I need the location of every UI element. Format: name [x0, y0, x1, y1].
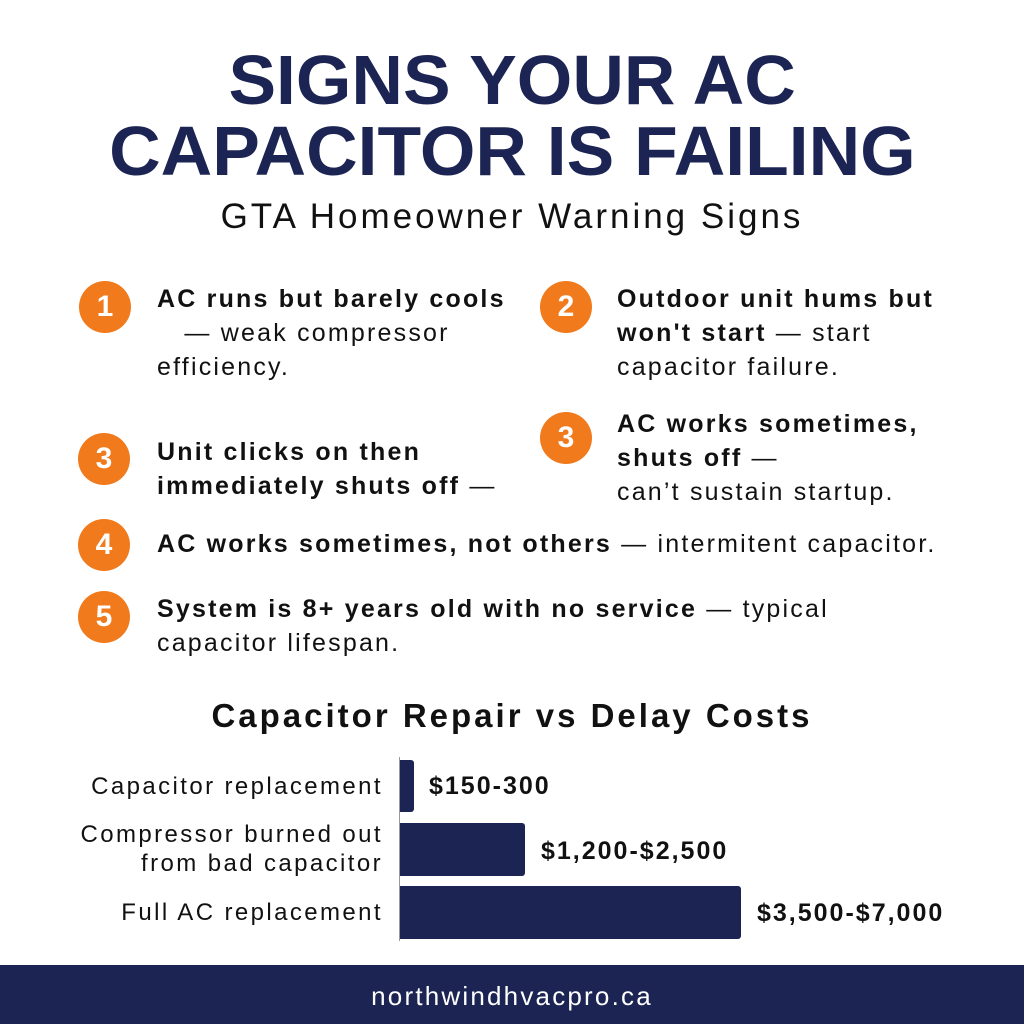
bar: capacitor replacement: Capacitor replacement [91, 773, 383, 800]
sign 4: AC works sometimes, not others — intermitent capacitor. [157, 530, 937, 558]
sign 3 right [540, 410, 919, 506]
sign 3 left: immediately shuts off — [157, 472, 497, 500]
title [109, 41, 915, 190]
sign 2: won't start — start [617, 319, 872, 347]
bar: compressor: from bad capacitor [141, 850, 383, 877]
sign 4 [78, 519, 937, 571]
badge 2: 2 [558, 290, 574, 323]
title: SIGNS YOUR AC [228, 41, 796, 119]
badge 3: 3 [96, 442, 112, 475]
badge 3: 3 [558, 421, 574, 454]
footer: northwindhvacpro.ca [371, 981, 653, 1011]
title: CAPACITOR IS FAILING [109, 112, 915, 190]
sign 3 right: AC works sometimes, [617, 410, 919, 438]
bar: compressor [80, 821, 728, 877]
sign 5: capacitor lifespan. [157, 629, 400, 657]
sign 1: — weak compressor [184, 319, 450, 347]
badge 4 [78, 519, 130, 571]
bar chart [80, 757, 944, 941]
badge 5 [78, 591, 130, 643]
sign 3 right: can’t sustain startup. [617, 478, 895, 506]
sign 3 left [78, 433, 497, 500]
sign 3 right: shuts off — [617, 444, 779, 472]
bar: full replacement: Full AC replacement [121, 899, 383, 926]
sign 1 [79, 281, 506, 381]
sign 5 [78, 591, 829, 657]
bar: full replacement: $3,500-$7,000 [757, 899, 944, 927]
bar: full replacement [121, 886, 944, 939]
chart title: Capacitor Repair vs Delay Costs [211, 697, 813, 734]
badge 4: 4 [96, 528, 112, 561]
footer [0, 965, 1024, 1024]
bar: capacitor replacement: $150-300 [429, 772, 551, 800]
sign 3 left: Unit clicks on then [157, 438, 421, 466]
badge 1: 1 [97, 290, 113, 323]
sign 2: Outdoor unit hums but [617, 285, 934, 313]
subtitle: GTA Homeowner Warning Signs [221, 197, 803, 236]
sign 1: AC runs but barely cools [157, 285, 506, 313]
bar: capacitor replacement [91, 760, 551, 812]
sign 1: efficiency. [157, 353, 290, 381]
badge 3 [540, 412, 592, 464]
badge 3 [78, 433, 130, 485]
bar: compressor: $1,200-$2,500 [541, 837, 728, 865]
sign 5: System is 8+ years old with no service — typical [157, 595, 829, 623]
badge 5: 5 [96, 600, 112, 633]
bar: compressor: Compressor burned out [80, 821, 383, 848]
badge 2 [540, 281, 592, 333]
sign 2 [540, 281, 934, 381]
badge 1 [79, 281, 131, 333]
sign 2: capacitor failure. [617, 353, 840, 381]
